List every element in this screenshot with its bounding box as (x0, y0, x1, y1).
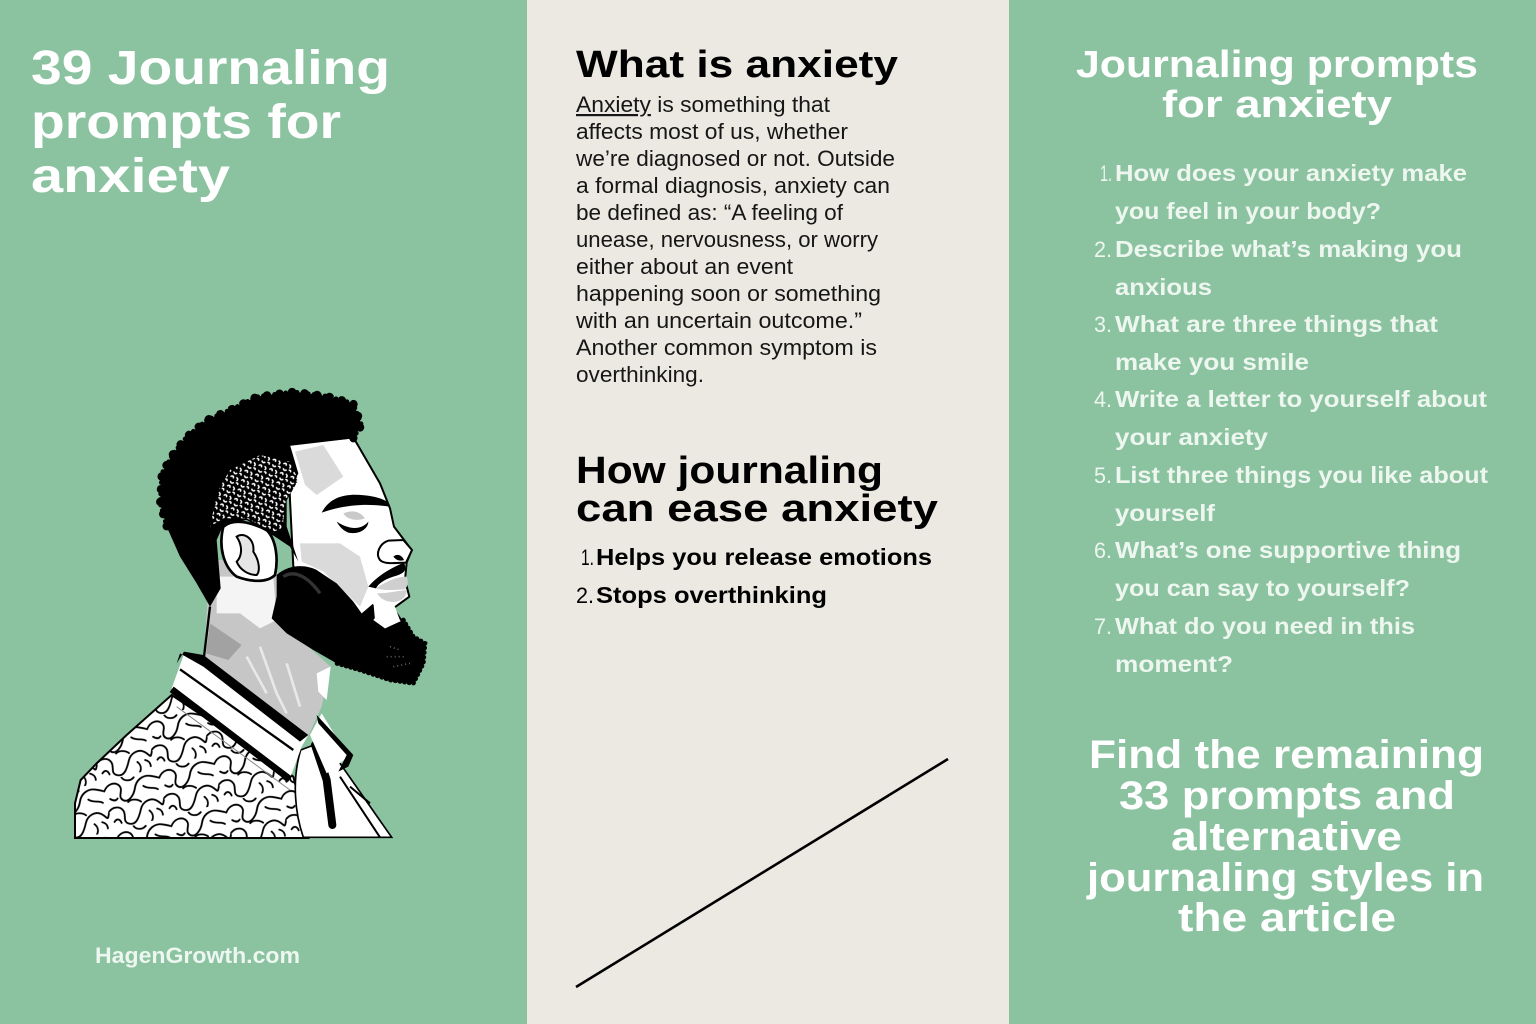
prompts list: 2. (1094, 237, 1112, 262)
definition text: overthinking. (576, 362, 704, 387)
prompts list: 4. (1094, 387, 1112, 412)
illustration: bearded man in profile (75, 392, 425, 838)
call to action: 33 prompts and (1119, 774, 1455, 818)
definition text: a formal diagnosis, anxiety can (576, 173, 890, 198)
call to action: the article (1178, 896, 1396, 940)
title: anxiety (31, 150, 230, 203)
title (31, 42, 390, 203)
call to action (1086, 733, 1484, 940)
prompts list: make you smile (1115, 349, 1309, 375)
heading: how journaling can ease anxiety: How journaling (576, 450, 883, 492)
beard (272, 566, 425, 683)
benefits list: Helps you release emotions (596, 544, 932, 570)
prompts list: 6. (1094, 538, 1112, 563)
prompts list: you feel in your body? (1115, 198, 1381, 224)
definition text: either about an event (576, 254, 793, 279)
prompts list: How does your anxiety make (1115, 160, 1467, 186)
prompts list: Write a letter to yourself about (1115, 386, 1487, 412)
website credit: HagenGrowth.com (95, 943, 300, 968)
definition text: with an uncertain outcome.” (575, 308, 862, 333)
benefits list (576, 544, 932, 608)
nose (378, 540, 412, 563)
call to action: alternative (1171, 815, 1402, 859)
prompts list: moment? (1115, 651, 1233, 677)
prompts list: 3. (1094, 312, 1112, 337)
heading: journaling prompts for anxiety: for anxiety (1162, 84, 1392, 126)
prompts list (1094, 160, 1488, 677)
heading: what is anxiety: What is anxiety (576, 44, 898, 86)
call to action: Find the remaining (1089, 733, 1484, 777)
benefits list: 1. (581, 545, 594, 570)
definition text: Anxiety is something that (576, 92, 830, 117)
face (288, 437, 412, 633)
definition text: affects most of us, whether (576, 119, 848, 144)
definition text: Another common symptom is (576, 335, 877, 360)
prompts list: yourself (1115, 500, 1215, 526)
prompts list: List three things you like about (1115, 462, 1488, 488)
prompts list: Describe what’s making you (1115, 236, 1462, 262)
diagonal line (576, 759, 948, 987)
mouth and moustache (368, 563, 408, 628)
title: prompts for (31, 96, 341, 149)
prompts list: your anxiety (1115, 424, 1268, 450)
definition text: unease, nervousness, or worry (576, 227, 878, 252)
heading: how journaling can ease anxiety (576, 450, 938, 530)
benefits list: 2. (576, 583, 594, 608)
prompts list: What are three things that (1115, 311, 1438, 337)
title: 39 Journaling (31, 42, 390, 95)
ear (221, 522, 277, 581)
definition text: we’re diagnosed or not. Outside (575, 146, 895, 171)
prompts list: What’s one supportive thing (1115, 537, 1461, 563)
panel: journaling prompts (1009, 0, 1536, 1024)
prompts list: What do you need in this (1115, 613, 1415, 639)
prompts list: 1. (1100, 161, 1112, 186)
definition text: happening soon or something (576, 281, 881, 306)
eyebrow and closed eye (322, 495, 390, 513)
panel: what is anxiety (527, 0, 1009, 1024)
prompts list: 7. (1094, 614, 1112, 639)
shirt (75, 652, 392, 838)
neck (204, 560, 331, 736)
call to action: journaling styles in (1086, 856, 1484, 900)
collar (172, 654, 308, 778)
prompts list: 5. (1094, 463, 1112, 488)
heading: how journaling can ease anxiety: can ease anxiety (576, 488, 938, 530)
hair (160, 392, 362, 607)
heading: journaling prompts for anxiety (1076, 44, 1478, 126)
shirt placket and right front (295, 743, 392, 837)
panel: cover (0, 0, 527, 1024)
heading: journaling prompts for anxiety: Journaling prompts (1076, 44, 1478, 86)
definition text (575, 92, 895, 387)
prompts list: you can say to yourself? (1115, 575, 1410, 601)
prompts list: anxious (1115, 274, 1212, 300)
definition text: be defined as: “A feeling of (576, 200, 844, 225)
benefits list: Stops overthinking (596, 582, 827, 608)
